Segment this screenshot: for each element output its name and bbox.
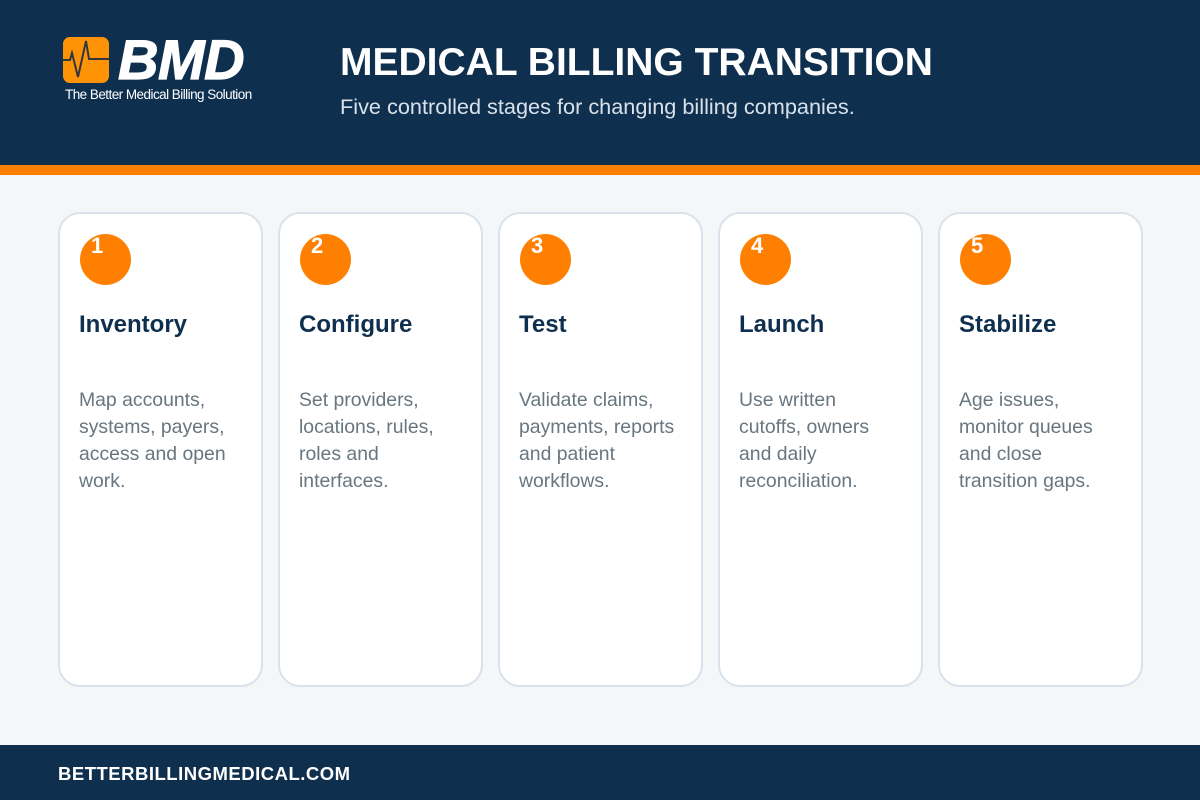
text: configure: roles and xyxy=(299,443,379,465)
step number 5: 5 xyxy=(971,233,983,258)
text: test xyxy=(519,389,674,492)
logo xyxy=(63,28,252,102)
text: stabilize xyxy=(959,389,1093,492)
text: test: workflows. xyxy=(519,470,610,492)
text: inventory: access and open xyxy=(79,443,226,465)
panel: inventory xyxy=(58,212,263,687)
text: stabilize: transition gaps. xyxy=(959,470,1091,492)
step number 3: 3 xyxy=(531,233,543,258)
text: configure: interfaces. xyxy=(299,470,388,492)
step circle 2 xyxy=(300,234,351,285)
text: configure xyxy=(299,389,434,492)
logo wordmark: BMD xyxy=(118,28,244,91)
heading: configure: Configure xyxy=(299,311,412,338)
text: test: and patient xyxy=(519,443,615,465)
text: stabilize: monitor queues xyxy=(959,416,1093,438)
icon: heartbeat xyxy=(63,37,109,83)
footer band xyxy=(0,745,1200,800)
text: configure: locations, rules, xyxy=(299,416,434,438)
heading: launch: Launch xyxy=(739,311,824,338)
step number 2: 2 xyxy=(311,233,323,258)
panel: configure xyxy=(278,212,483,687)
step circle 4 xyxy=(740,234,791,285)
text: inventory xyxy=(79,389,226,492)
logo tagline: The Better Medical Billing Solution xyxy=(65,87,252,102)
heading: stabilize: Stabilize xyxy=(959,311,1056,338)
text: inventory: systems, payers, xyxy=(79,416,224,438)
heading: test: Test xyxy=(519,311,567,338)
panel: test xyxy=(498,212,703,687)
text: stabilize: Age issues, xyxy=(959,389,1059,411)
title: MEDICAL BILLING TRANSITION xyxy=(340,41,933,84)
text: inventory: Map accounts, xyxy=(79,389,205,411)
subtitle: Five controlled stages for changing billing companies. xyxy=(340,94,855,119)
text: launch: reconciliation. xyxy=(739,470,858,492)
text: launch: Use written xyxy=(739,389,836,411)
panel: launch xyxy=(718,212,923,687)
heading: inventory: Inventory xyxy=(79,311,187,338)
panel: stabilize xyxy=(938,212,1143,687)
text: launch: cutoffs, owners xyxy=(739,416,869,438)
step circle 5 xyxy=(960,234,1011,285)
text: configure: Set providers, xyxy=(299,389,419,411)
footer url: BETTERBILLINGMEDICAL.COM xyxy=(58,763,351,784)
text: launch xyxy=(739,389,869,492)
text: test: payments, reports xyxy=(519,416,674,438)
text: test: Validate claims, xyxy=(519,389,653,411)
orange accent bar xyxy=(0,165,1200,175)
header band xyxy=(0,0,1200,165)
text: inventory: work. xyxy=(79,470,125,492)
step number 4: 4 xyxy=(751,233,763,258)
step circle 1 xyxy=(80,234,131,285)
step number 1: 1 xyxy=(91,233,103,258)
step circle 3 xyxy=(520,234,571,285)
text: stabilize: and close xyxy=(959,443,1042,465)
text: launch: and daily xyxy=(739,443,817,465)
